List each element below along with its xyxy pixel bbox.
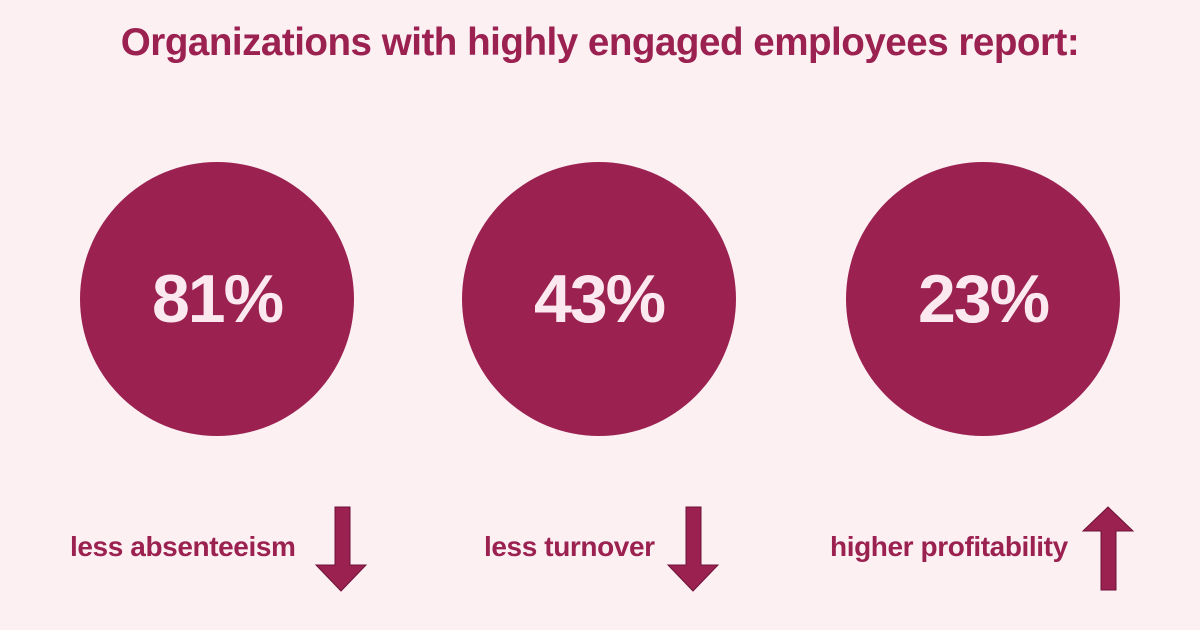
circle: 23% (846, 162, 1120, 436)
arrow: down 2 (668, 507, 718, 591)
arrow: down 1 (316, 507, 366, 591)
circle: 81%: 81% (152, 261, 282, 337)
circle: 43% (462, 162, 736, 436)
circle: 81% (80, 162, 354, 436)
label: less turnover: less turnover (484, 531, 655, 562)
circle: 43%: 43% (534, 261, 664, 337)
label: higher profitability: higher profitability (830, 531, 1068, 562)
label: less absenteeism: less absenteeism (70, 531, 296, 562)
circle: 23%: 23% (918, 261, 1048, 337)
title: Organizations with highly engaged employees report: (121, 21, 1079, 64)
arrow: up 3 (1083, 507, 1133, 590)
